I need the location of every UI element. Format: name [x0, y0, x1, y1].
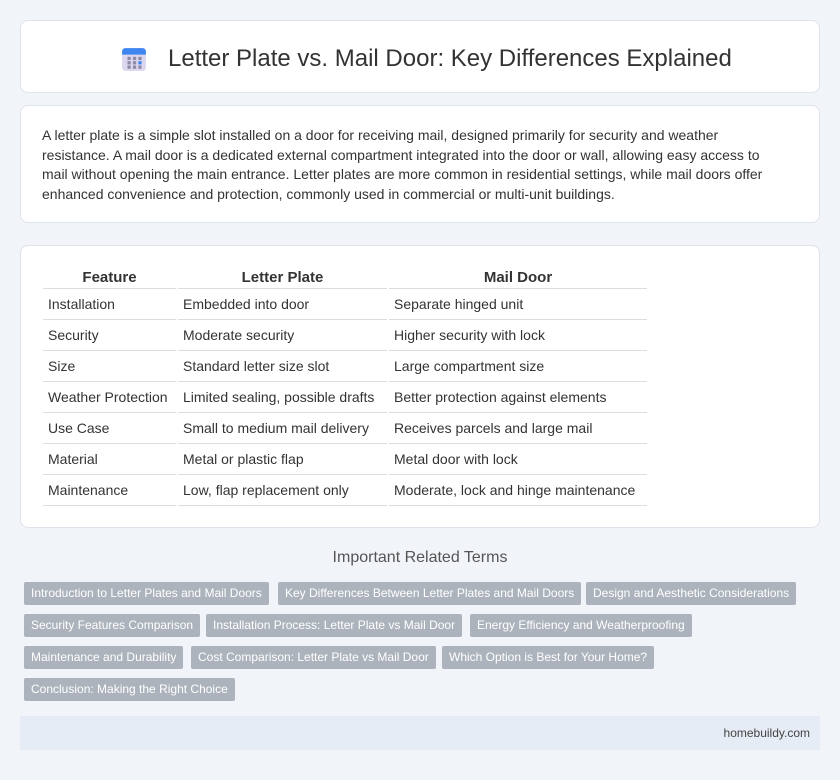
comparison table: Moderate security — [183, 327, 294, 343]
description card: A letter plate is a simple slot installed on a door for receiving mail, designed primarily for security and weather resistance. A mail door is a dedicated external compartment integrated into the door or wall, allowing easy access to mail without opening the main entrance. Letter plates are more common in residential settings, while mail doors offer enhanced convenience and protection, commonly used in commercial or multi-unit buildings. — [42, 127, 762, 202]
related terms tags: Conclusion: Making the Right Choice — [31, 682, 228, 696]
comparison table: Low, flap replacement only — [183, 482, 349, 498]
comparison table: Separate hinged unit — [394, 296, 523, 312]
footer: homebuildy.com — [724, 726, 810, 740]
comparison table: Maintenance — [48, 482, 128, 498]
related terms tags: Which Option is Best for Your Home? — [449, 650, 647, 664]
comparison table: Size — [48, 358, 75, 374]
comparison table: Embedded into door — [183, 296, 309, 312]
header card — [20, 20, 820, 93]
comparison table: Letter Plate — [242, 268, 323, 286]
comparison table: Weather Protection — [48, 389, 168, 405]
comparison table: Metal or plastic flap — [183, 451, 304, 467]
comparison table: Feature — [82, 268, 137, 286]
comparison table: Installation — [48, 296, 115, 312]
comparison table: Large compartment size — [394, 358, 544, 374]
comparison table: Mail Door — [484, 268, 552, 286]
related terms tags: Introduction to Letter Plates and Mail Doors — [31, 586, 262, 600]
comparison table: Better protection against elements — [394, 389, 606, 405]
comparison table: Standard letter size slot — [183, 358, 329, 374]
comparison table: Limited sealing, possible drafts — [183, 389, 374, 405]
comparison table: Moderate, lock and hinge maintenance — [394, 482, 635, 498]
related terms tags: Installation Process: Letter Plate vs Mail Door — [213, 618, 455, 632]
related terms tags: Cost Comparison: Letter Plate vs Mail Door — [198, 650, 429, 664]
comparison table: Receives parcels and large mail — [394, 420, 592, 436]
comparison table: Security — [48, 327, 99, 343]
comparison table: Small to medium mail delivery — [183, 420, 369, 436]
related terms tags: Maintenance and Durability — [31, 650, 176, 664]
comparison table: Material — [48, 451, 98, 467]
comparison table: Higher security with lock — [394, 327, 545, 343]
comparison table: Metal door with lock — [394, 451, 518, 467]
related terms tags: Key Differences Between Letter Plates and Mail Doors — [285, 586, 574, 600]
description card — [20, 105, 820, 223]
icon: calendar — [122, 48, 146, 71]
comparison table: Use Case — [48, 420, 109, 436]
related terms tags: Energy Efficiency and Weatherproofing — [477, 618, 685, 632]
comparison table card — [20, 245, 820, 528]
comparison table — [43, 268, 647, 506]
related terms heading: Important Related Terms — [333, 549, 507, 566]
related terms tags: Security Features Comparison — [31, 618, 193, 632]
footer — [20, 716, 820, 750]
related terms tags: Design and Aesthetic Considerations — [593, 586, 789, 600]
title: Letter Plate vs. Mail Door: Key Differences Explained — [168, 45, 732, 72]
